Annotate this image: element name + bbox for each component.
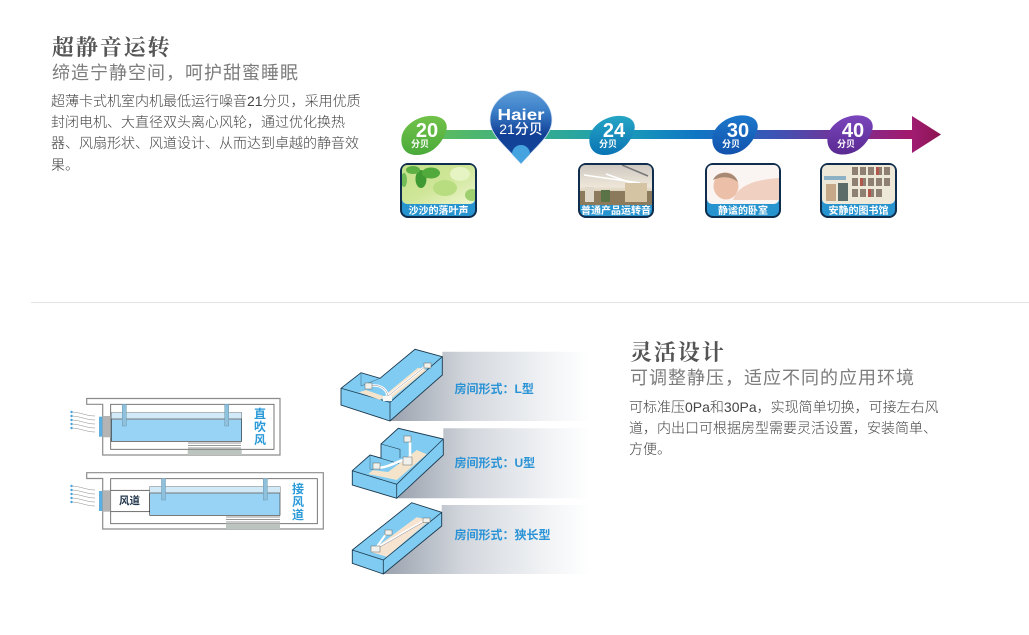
- diagram: direct blow and ducted installation: [70, 398, 324, 530]
- body text: ultra-quiet: [51, 93, 361, 173]
- diagram: ducted: 接: [292, 481, 304, 496]
- photo card: ordinary product operating sound: 普通产品运转音: [581, 204, 651, 217]
- photo card: quiet library: [821, 164, 896, 217]
- diagram: direct blow: 风: [254, 433, 266, 447]
- body text: flexible design: 道，内出口可根据房型需要灵活设置，安装简单、: [629, 420, 937, 436]
- photo card: rustling leaves: 沙沙的落叶声: [408, 204, 468, 217]
- marker: 20 decibels: 分贝: [411, 138, 429, 149]
- photo card: quiet bedroom: 静谧的卧室: [718, 204, 768, 217]
- subheading: flexible design: 可调整静压，适应不同的应用环境: [630, 368, 915, 388]
- body text: ultra-quiet: 果。: [51, 157, 79, 173]
- body text: flexible design: [629, 399, 939, 457]
- body text: flexible design: 可标准压0Pa和30Pa，实现简单切换，可接左右风: [629, 399, 939, 415]
- diagram: ducted: 风: [292, 495, 304, 509]
- marker: Haier 21 decibels pin: 21分贝: [499, 121, 543, 137]
- body text: ultra-quiet: 超薄卡式机室内机最低运行噪音21分贝，采用优质: [51, 93, 361, 109]
- body text: ultra-quiet: 封闭电机、大直径双头离心风轮，通过优化换热: [51, 114, 345, 130]
- marker: Haier 21 decibels pin: [490, 90, 552, 164]
- marker: 24 decibels: 24: [603, 120, 626, 142]
- body text: flexible design: 方便。: [629, 441, 671, 457]
- diagram: ducted: 风道: [119, 494, 140, 507]
- photo card: rustling leaves: [401, 164, 479, 217]
- marker: 40 decibels: 40: [842, 120, 864, 142]
- marker: 40 decibels: 分贝: [837, 138, 855, 149]
- body text: ultra-quiet: 器、风扇形状、风道设计、从而达到卓越的静音效: [51, 135, 359, 151]
- marker: 20 decibels: 20: [416, 120, 438, 142]
- chart: noise level timeline: [400, 90, 941, 218]
- marker: 24 decibels: [589, 116, 635, 155]
- room types panel: [340, 348, 566, 574]
- marker: 30 decibels: 分贝: [722, 138, 740, 149]
- marker: 20 decibels: [401, 116, 447, 155]
- heading: ultra-quiet: 超静音运转: [52, 35, 172, 60]
- text block: flexible design: [629, 340, 939, 457]
- room type: narrow shape: [352, 503, 590, 574]
- marker: Haier 21 decibels pin: Haier: [498, 107, 544, 124]
- text block: ultra-quiet operation: [51, 35, 361, 173]
- arrow line: [430, 116, 941, 153]
- marker: 30 decibels: [712, 115, 758, 154]
- diagram: direct blow: 吹: [254, 419, 266, 434]
- heading: flexible design: 灵活设计: [630, 340, 726, 365]
- marker: 40 decibels: [827, 115, 873, 154]
- diagram: ducted: [70, 473, 323, 529]
- subheading: ultra-quiet: 缔造宁静空间，呵护甜蜜睡眠: [52, 63, 299, 83]
- marker: 24 decibels: 分贝: [599, 138, 617, 149]
- room type: narrow shape: 房间形式：狭长型: [454, 527, 551, 542]
- diagram: direct blow: 直: [254, 406, 266, 421]
- photo card: ordinary product operating sound: [579, 164, 653, 217]
- room type: L shape: 房间形式：L型: [454, 381, 534, 396]
- marker: 30 decibels: 30: [727, 120, 749, 142]
- photo card: quiet library: 安静的图书馆: [828, 204, 888, 217]
- room type: U shape: [352, 428, 590, 498]
- room type: L shape: [341, 349, 590, 421]
- diagram: ducted: 道: [292, 507, 304, 522]
- diagram: direct blow: [70, 398, 280, 455]
- photo card: quiet bedroom: [706, 164, 780, 217]
- room type: U shape: 房间形式：U型: [454, 455, 535, 470]
